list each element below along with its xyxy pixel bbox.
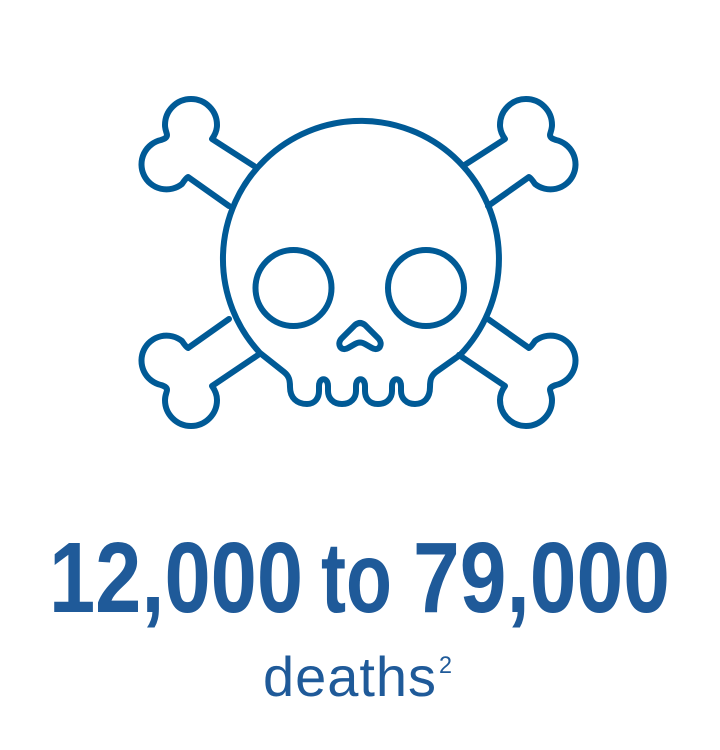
headline number: to: [321, 522, 392, 634]
icon: skull and crossbones: [141, 99, 576, 426]
caption: deaths: deaths: [263, 645, 436, 708]
icon: left eye: [256, 250, 332, 326]
headline number: 12,000: [49, 522, 303, 634]
icon: bone top right: [463, 99, 576, 206]
icon: bone top left: [141, 99, 254, 206]
headline number: 79,000: [413, 522, 670, 634]
headline number: [49, 522, 670, 634]
icon: bone bottom left: [141, 319, 258, 426]
icon: nose: [339, 323, 381, 349]
icon: right eye: [388, 250, 464, 326]
icon: bone bottom right: [459, 319, 576, 426]
icon: skull: [223, 121, 499, 404]
footnote marker: 2: [439, 652, 452, 679]
